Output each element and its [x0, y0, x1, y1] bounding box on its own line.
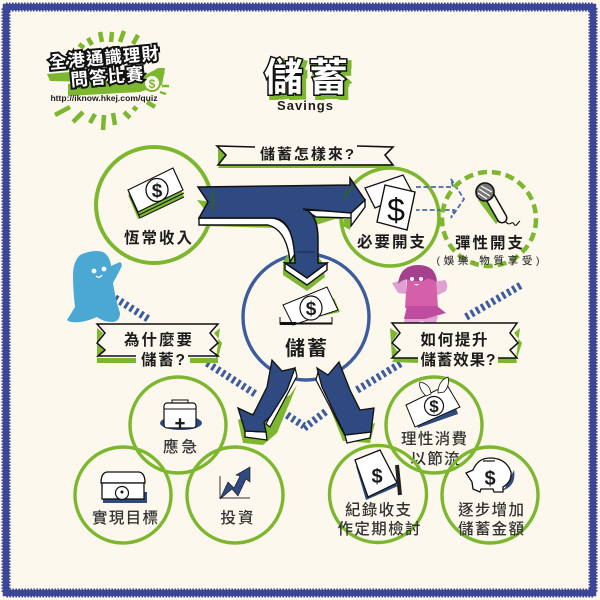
- banner: why save: [97, 324, 222, 369]
- icon: treasure box: [101, 472, 147, 503]
- logo: quiz badge: [47, 31, 169, 130]
- label: flexible expenses: 彈性開支: [455, 233, 523, 252]
- arrow: how to improve: [316, 362, 375, 443]
- banner: where savings come from: [217, 145, 393, 168]
- label: record expenses: 紀錄收支: [345, 501, 411, 519]
- circle: savings: [243, 254, 369, 380]
- icon: first aid kit: ✚: [174, 417, 186, 430]
- icon: ledger and pen: $: [371, 466, 383, 488]
- icon: bill and paper: $: [387, 192, 405, 228]
- title: 儲蓄: [267, 60, 351, 103]
- banner: how to improve: 如何提升: [420, 330, 488, 349]
- circle: flexible expenses: [436, 172, 540, 267]
- subtitle: Savings: [277, 98, 333, 113]
- arrow green shadow: [197, 200, 350, 291]
- label: savings: 儲蓄: [285, 337, 327, 360]
- label: investment: 投資: [220, 508, 254, 527]
- circles: how to improve savings: [330, 377, 538, 543]
- icon: banknote in slot: [280, 287, 340, 325]
- circle: necessary expenses: [341, 168, 439, 266]
- logo title line 2: 問答比賽: [70, 64, 145, 90]
- circle: record expenses: 作定期檢討: [338, 519, 420, 538]
- label: emergency: 應急: [163, 437, 197, 456]
- arrow white sides: [199, 200, 365, 285]
- circle overlap marks: [212, 192, 214, 210]
- icon: microphone: [476, 183, 520, 225]
- title: 儲蓄: [264, 57, 348, 100]
- arrow: why save: [238, 360, 297, 445]
- logo title line 1: 全港通識理財: [48, 43, 160, 73]
- circle: rational spending: [386, 377, 482, 473]
- icon: banknote stack: $: [152, 181, 163, 202]
- banner: why save: 為什麼要: [124, 330, 192, 349]
- sun coin: $: [149, 77, 156, 91]
- dashed arrow: [416, 179, 464, 218]
- circle: increase savings: [442, 447, 538, 543]
- banner: how to improve: [390, 323, 522, 369]
- banner: where savings come from: 儲蓄怎樣來?: [260, 145, 354, 163]
- arrow: income flow: [197, 178, 365, 291]
- character: blue mascot: [67, 251, 122, 322]
- label: regular income: 恆常收入: [124, 229, 192, 247]
- label: necessary expenses: 必要開支: [357, 233, 425, 251]
- banner: how to improve: 儲蓄效果?: [420, 350, 496, 369]
- circle: achieve goal: [75, 447, 171, 543]
- banner: why save: 儲蓄?: [141, 351, 185, 369]
- label: increase savings: 逐步增加: [458, 501, 524, 519]
- sun rays: [55, 31, 169, 130]
- logo url: http://iknow.hkej.com/quiz: [50, 93, 158, 103]
- circle: regular income: [96, 147, 212, 263]
- circle: record expenses: [330, 446, 426, 542]
- circle: increase savings: 儲蓄金額: [458, 519, 524, 538]
- circle: investment: [187, 447, 283, 543]
- circles: reasons to save: [75, 377, 283, 543]
- green underlay: [47, 68, 165, 96]
- label: entertainment, material enjoyment: (娛樂·物質享受): [436, 254, 540, 267]
- arrow navy body: [198, 178, 365, 278]
- character: pink mascot: [392, 265, 447, 325]
- striped connector lines: [115, 284, 523, 428]
- icon: winged banknote: $: [429, 397, 439, 416]
- label: achieve goal: 實現目標: [92, 509, 158, 527]
- banner text box: [136, 350, 188, 365]
- icon: growth chart: [220, 467, 250, 499]
- icon: piggy bank: $: [484, 468, 496, 490]
- circle: emergency: [130, 377, 226, 473]
- circle: rational spending: 以節流: [410, 449, 460, 468]
- label: rational spending: 理性消費: [401, 430, 467, 448]
- icon: banknote in slot: $: [306, 299, 317, 320]
